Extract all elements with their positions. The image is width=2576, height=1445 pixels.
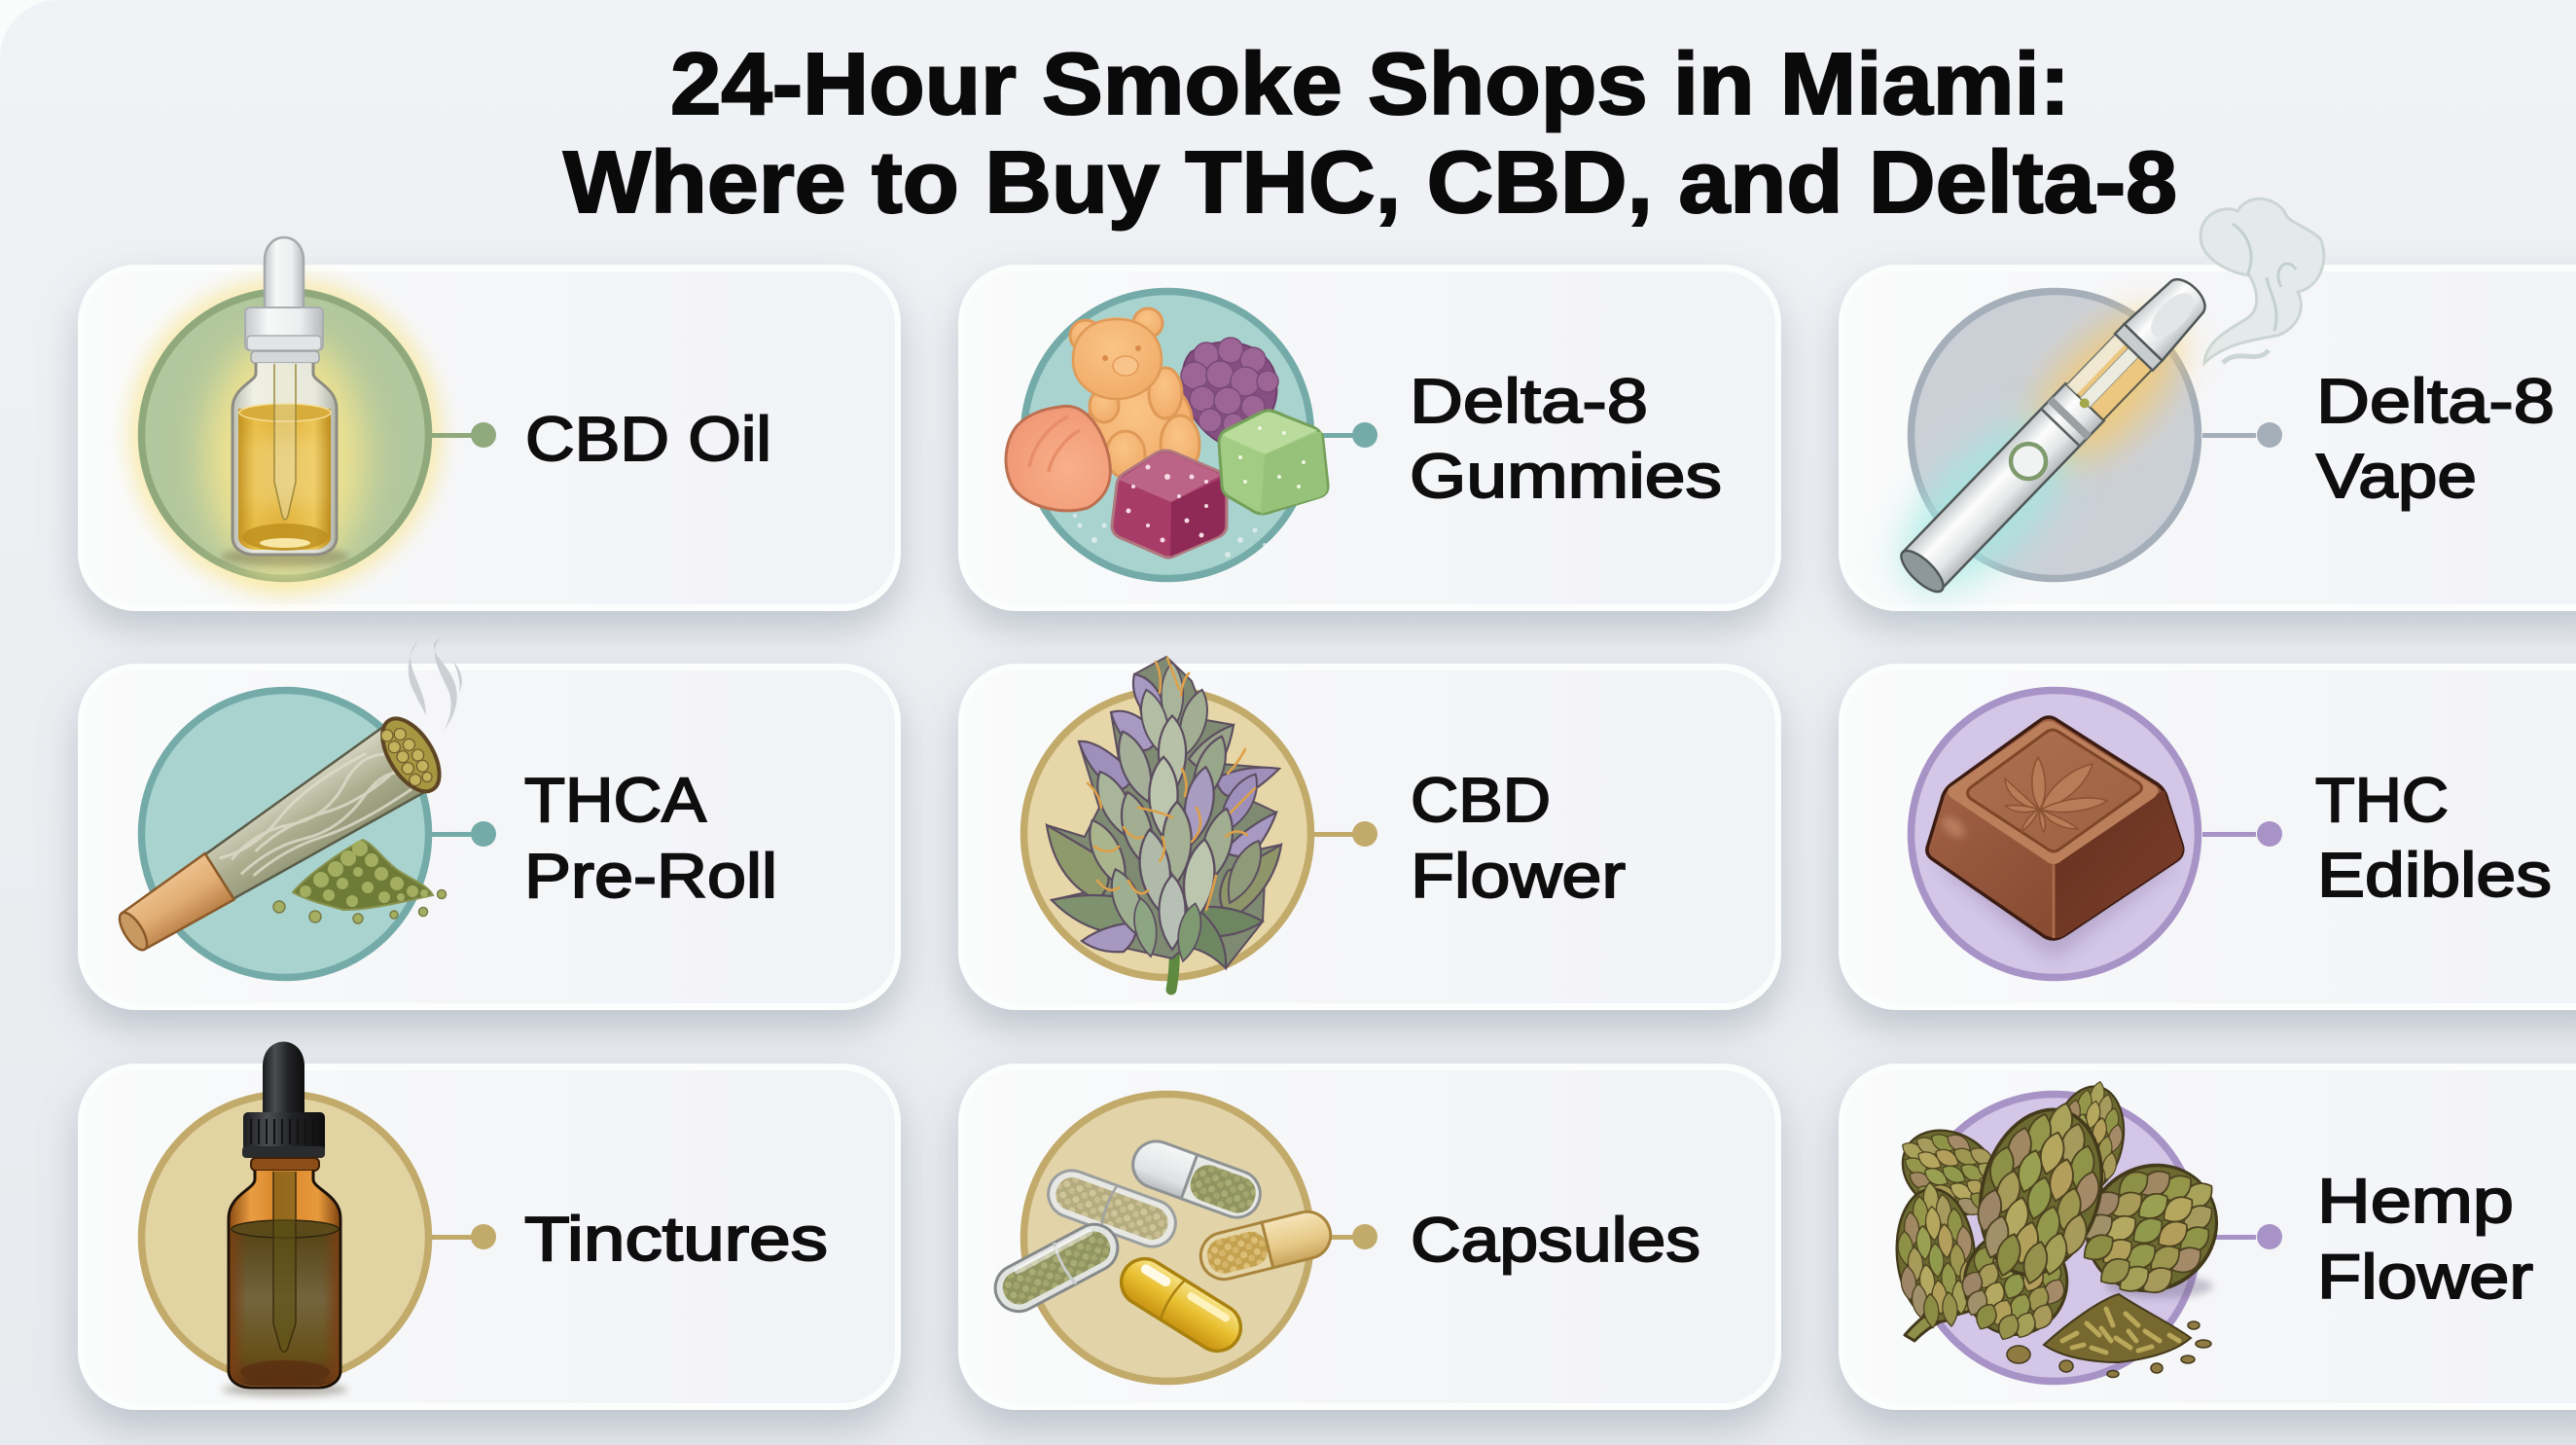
label <box>524 765 777 911</box>
icon: pre-roll smoke <box>409 637 462 732</box>
card <box>958 664 1781 1010</box>
connector <box>432 422 496 448</box>
label: Vape <box>2316 441 2477 511</box>
label: Flower <box>2317 1242 2533 1312</box>
icon circle <box>142 1094 428 1382</box>
icon circle <box>142 292 428 578</box>
label: THCA <box>524 765 706 835</box>
connector <box>2202 422 2282 448</box>
panel: Delta-8 Vape <box>1839 199 2576 618</box>
label <box>2315 765 2552 910</box>
label: Capsules <box>1411 1205 1700 1275</box>
label: Flower <box>1411 841 1626 911</box>
connector <box>1313 422 1377 448</box>
icon: gummies <box>1006 308 1328 558</box>
glow <box>127 277 443 593</box>
connector <box>432 1224 496 1249</box>
label <box>1411 765 1626 911</box>
label: Pre-Roll <box>524 841 777 911</box>
connector <box>432 821 496 847</box>
icon: CBD oil bottle <box>221 237 349 566</box>
title <box>563 36 2177 232</box>
panel: THC Edibles <box>1839 664 2576 1010</box>
panel: CBD Oil <box>78 237 901 611</box>
connector <box>1328 1224 1377 1249</box>
icon circle <box>1911 691 2199 977</box>
title: Where to Buy THC, CBD, and Delta-8 <box>563 134 2177 232</box>
icon circle <box>142 691 428 977</box>
panel: Delta-8 Gummies <box>958 265 1781 611</box>
icon: vape smoke <box>2200 199 2324 363</box>
icon circle <box>1023 1094 1311 1382</box>
panel: Capsules <box>958 1064 1781 1410</box>
card <box>78 664 901 1010</box>
title: 24-Hour Smoke Shops in Miami: <box>670 36 2070 133</box>
card <box>1839 664 2576 1010</box>
label: Gummies <box>1410 441 1722 511</box>
label: THC <box>2315 765 2449 835</box>
label <box>2317 1166 2533 1312</box>
icon circle <box>1911 292 2199 578</box>
icon: vape pen <box>1874 270 2215 618</box>
label: CBD <box>1411 765 1551 835</box>
icon: tincture bottle <box>222 1041 348 1396</box>
icon: pre-roll <box>104 709 450 970</box>
panel: CBD Flower <box>958 657 1781 1010</box>
card <box>78 1064 901 1410</box>
card <box>78 265 901 611</box>
icon circle <box>1023 691 1311 977</box>
label: CBD Oil <box>525 404 771 474</box>
icon circle <box>1911 1094 2199 1382</box>
icon: hemp buds <box>1883 1074 2246 1355</box>
icon: capsules <box>987 1135 1336 1359</box>
icon circle <box>1023 292 1311 578</box>
card <box>1839 265 2576 611</box>
label: Delta-8 <box>2316 366 2555 436</box>
connector <box>2202 1224 2282 1249</box>
label <box>2316 366 2555 511</box>
card <box>1839 1064 2576 1410</box>
connector <box>2202 821 2282 847</box>
icon: CBD flower <box>1047 657 1281 990</box>
label: Tinctures <box>524 1204 828 1274</box>
card <box>958 1064 1781 1410</box>
connector <box>1313 821 1377 847</box>
label <box>1410 366 1722 511</box>
icon: ground hemp pile <box>2007 1294 2211 1378</box>
panel: Hemp Flower <box>1839 1064 2576 1410</box>
label: Delta-8 <box>1410 366 1648 436</box>
panel: Tinctures <box>78 1041 901 1410</box>
label: Hemp <box>2317 1166 2514 1236</box>
card <box>958 265 1781 611</box>
label: Edibles <box>2317 840 2552 910</box>
panel: THCA Pre-Roll <box>78 637 901 1010</box>
icon: chocolate edible <box>1927 717 2183 958</box>
